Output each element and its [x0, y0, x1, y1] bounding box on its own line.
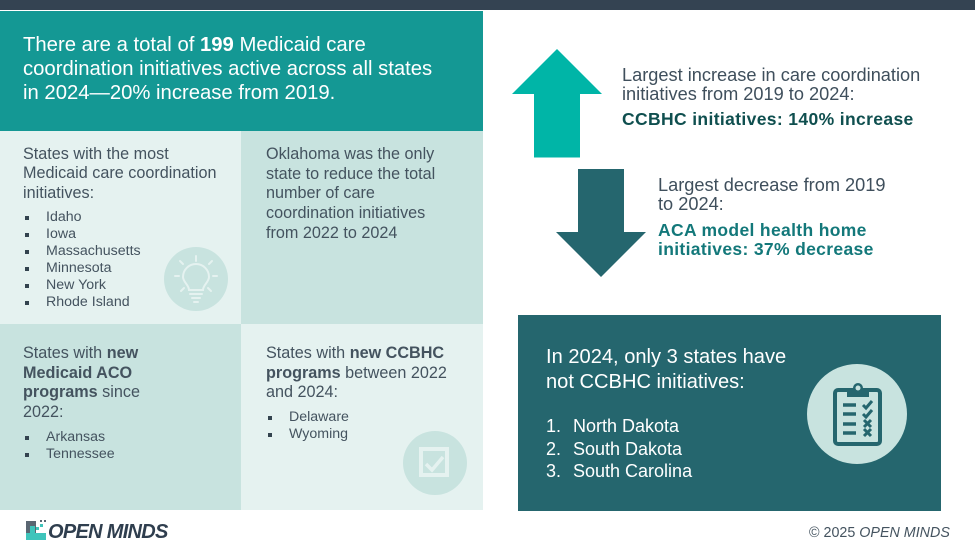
text: CCBHC intro	[266, 344, 447, 401]
panel: Oklahoma	[241, 131, 483, 324]
list: CCBHC states: Delaware	[289, 409, 349, 425]
list: CCBHC states	[268, 409, 349, 442]
text: most initiatives intro: initiatives:	[23, 184, 94, 202]
text: only 3 states: not CCBHC initiatives:	[546, 370, 745, 392]
header text: There are a total of 199 Medicaid care	[23, 34, 366, 56]
header text: coordination initiatives active across all states	[23, 58, 432, 80]
text: ACO intro: 2022:	[23, 402, 64, 420]
text: ACA decrease: initiatives: 37% decrease	[658, 239, 874, 259]
text: ACO intro: programs since	[23, 383, 140, 401]
text: most initiatives intro: Medicaid care coordination	[23, 164, 216, 182]
text: CCBHC intro: programs between 2022	[266, 364, 447, 382]
top bar	[0, 0, 975, 10]
panel: states with most initiatives	[0, 131, 241, 324]
text: CCBHC increase: CCBHC initiatives: 140% increase	[622, 109, 914, 129]
list: states: Rhode Island	[46, 294, 130, 310]
list: three states: 3.	[546, 461, 561, 481]
list: states: Minnesota	[46, 260, 111, 276]
icon: checkbox	[403, 431, 467, 495]
logo wordmark: OPEN MINDS	[48, 521, 168, 543]
text: largest increase: Largest increase in care coordination	[622, 65, 920, 85]
list: ACO states: Tennessee	[46, 446, 115, 462]
header text	[23, 34, 432, 104]
list: three states: 1.	[546, 416, 561, 436]
list: three states: South Carolina	[573, 461, 692, 481]
icon: light bulb	[164, 247, 228, 311]
text: largest increase: initiatives from 2019 to 2024:	[622, 84, 855, 104]
header panel	[0, 11, 483, 131]
list: three states	[546, 416, 692, 481]
text: ACA decrease: ACA model health home	[658, 220, 867, 240]
list: states: Iowa	[46, 226, 76, 242]
list: three states: 2.	[546, 438, 561, 458]
text: Oklahoma: from 2022 to 2024	[266, 224, 397, 242]
text: ACO intro	[23, 344, 140, 420]
text: most initiatives intro	[23, 144, 216, 202]
text: only 3 states: In 2024, only 3 states have	[546, 346, 786, 368]
text: only 3 states	[546, 346, 786, 392]
arrow: down	[556, 169, 646, 277]
panel: states without CCBHC	[518, 315, 941, 511]
list: states	[25, 209, 141, 310]
text: Oklahoma: number of care	[266, 184, 375, 202]
list: states: New York	[46, 277, 106, 293]
text: CCBHC intro: and 2024:	[266, 383, 338, 401]
logo: Open Minds	[26, 520, 168, 543]
text: CCBHC intro: States with new CCBHC	[266, 344, 444, 362]
text: largest decrease: Largest decrease from 2019	[658, 175, 885, 195]
text: ACA decrease	[658, 220, 874, 259]
arrow: up	[512, 49, 602, 158]
text: Oklahoma	[266, 145, 435, 242]
text: largest increase	[622, 65, 920, 104]
list: states: Massachusetts	[46, 243, 141, 259]
list: CCBHC states: Wyoming	[289, 426, 348, 442]
text: ACO intro: Medicaid ACO	[23, 364, 132, 382]
text: Oklahoma: state to reduce the total	[266, 165, 435, 183]
copyright: © 2025 OPEN MINDS	[809, 525, 950, 541]
list: states: Idaho	[46, 209, 82, 225]
text: largest decrease	[658, 175, 885, 214]
list: three states: South Dakota	[573, 438, 682, 458]
panel: new CCBHC programs	[241, 324, 483, 510]
text: Oklahoma: coordination initiatives	[266, 204, 425, 222]
text: most initiatives intro: States with the most	[23, 144, 169, 162]
icon: clipboard	[807, 364, 907, 464]
list: ACO states	[25, 429, 115, 462]
logo mark	[26, 520, 46, 540]
panel: new ACO programs	[0, 324, 241, 510]
text: Oklahoma: Oklahoma was the only	[266, 145, 434, 163]
header text: in 2024—20% increase from 2019.	[23, 82, 335, 104]
text: largest decrease: to 2024:	[658, 194, 724, 214]
list: ACO states: Arkansas	[46, 429, 105, 445]
text: ACO intro: States with new	[23, 344, 138, 362]
list: three states: North Dakota	[573, 416, 679, 436]
